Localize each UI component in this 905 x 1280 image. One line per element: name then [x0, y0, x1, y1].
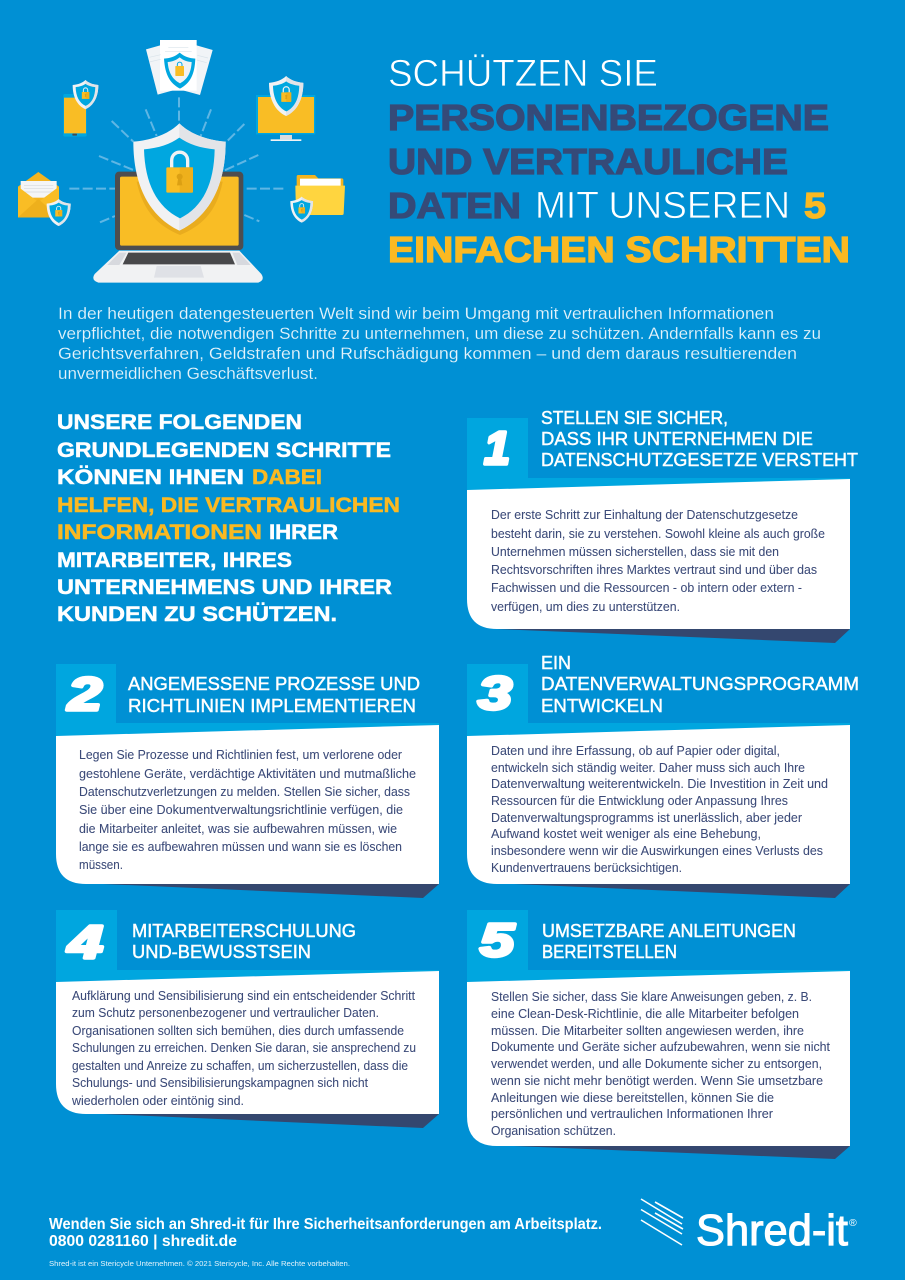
icon: folder with shield	[290, 175, 345, 223]
step 3 body text: Kundenvertrauens berücksichtigen.	[491, 860, 682, 875]
footer contact: Wenden Sie sich an Shred-it für Ihre Sicherheitsanforderungen am Arbeitsplatz.	[49, 1216, 602, 1233]
step 2 number: 2	[67, 668, 103, 720]
lead statement: HELFEN, DIE VERTRAULICHEN	[57, 494, 400, 517]
icon: laptop	[93, 172, 263, 283]
step 1 body text: verfügen, um dies zu unterstützen.	[491, 599, 680, 614]
intro paragraph: Gerichtsverfahren, Geldstrafen und Rufschädigung kommen – und dem daraus resultierenden	[58, 345, 797, 363]
lead statement: UNSERE FOLGENDEN	[57, 411, 302, 434]
lead statement: UNTERNEHMENS UND IHRER	[57, 576, 392, 599]
step 2 body text: gestohlene Geräte, verdächtige Aktivitäten und mutmaßliche	[79, 766, 416, 781]
step 4 body text: Organisationen sollten sich bemühen, dies durch umfassende	[72, 1023, 404, 1038]
step 4 heading	[132, 920, 356, 962]
illustration: laptop protected by shield with connected devices	[18, 40, 345, 283]
step 5 body text: Stellen Sie sicher, dass Sie klare Anweisungen geben, z. B.	[491, 989, 812, 1004]
lead statement: KUNDEN ZU SCHÜTZEN.	[57, 603, 337, 626]
step 2 body text: Sie über eine Dokumentverwaltungsrichtlinie verfügen, die	[79, 802, 403, 817]
step 3 body text: entwickeln sich ständig weiter. Daher muss sich auch Ihre	[491, 760, 805, 775]
step 2 body text: Datenschutzverletzungen zu melden. Stellen Sie sicher, dass	[79, 784, 410, 799]
step 3 body text: Daten und ihre Erfassung, ob auf Papier oder digital,	[491, 743, 780, 758]
step 3 body text: Datenverwaltungsprogramms ist unerlässlich, aber jeder	[491, 810, 803, 825]
step 2 body text	[79, 747, 416, 872]
panel: step 4	[56, 910, 439, 1128]
step 3 heading: DATENVERWALTUNGSPROGRAMM	[541, 673, 859, 694]
step 4 body text	[71, 988, 416, 1108]
panel: step 2	[56, 664, 439, 898]
icon: documents with shield	[146, 40, 213, 95]
step 2 heading	[128, 673, 420, 716]
panel: step 1	[467, 407, 858, 643]
icon: envelope with shield	[18, 172, 71, 226]
step 5 body text: Organisation schützen.	[491, 1123, 616, 1138]
step 2 heading: ANGEMESSENE PROZESSE UND	[128, 673, 420, 694]
intro paragraph: unvermeidlichen Geschäftsverlust.	[58, 365, 318, 383]
title	[388, 53, 850, 270]
lead statement: IHRER	[269, 521, 338, 544]
step 5 heading: UMSETZBARE ANLEITUNGEN	[542, 920, 796, 941]
step 3 body text: Ressourcen für die Entwicklung oder Anpassung Ihres	[491, 793, 788, 808]
logo: Shred-it: ®	[849, 1217, 857, 1229]
step 5 body text: persönlichen und vertraulichen Informationen Ihrer	[491, 1106, 774, 1121]
lead statement: INFORMATIONEN	[57, 521, 262, 544]
panel: step 5	[467, 910, 850, 1159]
step 2 heading: RICHTLINIEN IMPLEMENTIEREN	[128, 695, 416, 716]
icon: desktop monitor with shield	[256, 76, 315, 141]
dashed connector rays	[69, 97, 286, 222]
step 5 body text: eine Clean-Desk-Richtlinie, die alle Mitarbeiter befolgen	[491, 1006, 799, 1021]
lead statement: MITARBEITER, IHRES	[57, 549, 292, 572]
lead statement: KÖNNEN IHNEN	[57, 466, 244, 489]
step 1 number: 1	[484, 422, 510, 474]
step 5 heading	[542, 920, 796, 962]
step 2 body text: die Mitarbeiter anleitet, was sie aufbewahren müssen, wie	[79, 821, 397, 836]
legal note: Shred-it ist ein Stericycle Unternehmen. © 2021 Stericycle, Inc. Alle Rechte vorbehalten.	[49, 1259, 350, 1268]
step 2 body text: Legen Sie Prozesse und Richtlinien fest, um verlorene oder	[79, 747, 403, 762]
lead statement: DABEI	[252, 466, 322, 489]
footer contact: 0800 0281160 | shredit.de	[49, 1233, 237, 1250]
step 3 body text: Datenverwaltung weiterentwickeln. Die Investition in Zeit und	[491, 776, 828, 791]
lead statement: GRUNDLEGENDEN SCHRITTE	[57, 439, 391, 462]
step 2 body text: müssen.	[79, 857, 123, 872]
title: UND VERTRAULICHE	[388, 141, 788, 182]
step 3 body text	[491, 743, 828, 875]
title: MIT UNSEREN	[535, 185, 790, 227]
step 3 body text: Aufwand kostet weit weniger als eine Behebung,	[491, 826, 761, 841]
title: DATEN	[388, 185, 521, 226]
title: 5	[804, 185, 826, 226]
step 3 heading	[541, 652, 859, 716]
step 5 body text	[490, 989, 830, 1138]
footer contact	[49, 1216, 602, 1250]
step 1 body text	[491, 507, 825, 614]
step 5 number: 5	[480, 914, 516, 966]
title: PERSONENBEZOGENE	[388, 97, 829, 138]
icon: main shield with padlock	[133, 123, 226, 235]
step 5 body text: Anleitungen wie diese bereitstellen, können Sie die	[491, 1090, 774, 1105]
intro paragraph	[58, 305, 821, 383]
step 4 body text: wiederholen oder eintönig sind.	[71, 1093, 244, 1108]
step 5 body text: Dokumente und Geräte sicher aufzubewahren, wenn sie nicht	[491, 1039, 830, 1054]
step 4 heading: UND-BEWUSSTSEIN	[132, 941, 311, 962]
step 1 heading	[541, 407, 858, 470]
step 4 body text: Schulungen zu erreichen. Denken Sie daran, sie ansprechend zu	[72, 1040, 416, 1055]
step 1 body text: Unternehmen müssen sicherstellen, dass sie mit den	[491, 544, 779, 559]
step 1 heading: DATENSCHUTZGESETZE VERSTEHT	[541, 449, 858, 470]
step 3 number: 3	[478, 667, 513, 719]
icon: tablet with shield	[63, 80, 98, 137]
lead statement	[57, 411, 400, 626]
step 4 body text: zum Schutz personenbezogener und vertraulicher Daten.	[72, 1005, 379, 1020]
intro paragraph: verpflichtet, die notwendigen Schritte zu unternehmen, um diese zu schützen. Andernfalls kann es zu	[58, 325, 821, 343]
step 1 body text: Fachwissen und die Ressourcen - ob intern oder extern -	[491, 580, 802, 595]
title: EINFACHEN SCHRITTEN	[388, 229, 850, 270]
step 1 body text: besteht darin, sie zu verstehen. Sowohl kleine als auch große	[491, 526, 825, 541]
step 5 body text: wenn sie nicht mehr benötigt werden. Wenn Sie umsetzbare	[490, 1073, 823, 1088]
step 4 heading: MITARBEITERSCHULUNG	[132, 920, 356, 941]
step 2 body text: lange sie es aufbewahren müssen und wann sie es löschen	[79, 839, 402, 854]
step 5 heading: BEREITSTELLEN	[542, 941, 677, 962]
step 4 number: 4	[67, 916, 103, 968]
step 1 body text: Der erste Schritt zur Einhaltung der Datenschutzgesetze	[491, 507, 798, 522]
step 1 heading: DASS IHR UNTERNEHMEN DIE	[541, 428, 813, 449]
title: SCHÜTZEN SIE	[388, 53, 658, 95]
panel: step 3	[467, 652, 859, 898]
step 1 body text: Rechtsvorschriften ihres Marktes vertraut sind und über das	[491, 562, 817, 577]
step 4 body text: Schulungs- und Sensibilisierungskampagnen sich nicht	[72, 1075, 368, 1090]
intro paragraph: In der heutigen datengesteuerten Welt sind wir beim Umgang mit vertraulichen Informationen	[58, 305, 774, 323]
step 5 body text: verwendet werden, und alle Dokumente sicher zu entsorgen,	[491, 1056, 822, 1071]
step 1 heading: STELLEN SIE SICHER,	[541, 407, 728, 428]
step 3 heading: EIN	[541, 652, 571, 673]
logo: Shred-it: Shred-it	[696, 1206, 848, 1255]
step 3 body text: insbesondere wenn wir die Auswirkungen eines Verlusts des	[491, 843, 823, 858]
step 4 body text: gestalten und Anreize zu schaffen, um sicherzustellen, dass die	[72, 1058, 408, 1073]
step 3 heading: ENTWICKELN	[541, 695, 663, 716]
logo: Shred-it	[641, 1199, 857, 1255]
step 5 body text: müssen. Die Mitarbeiter sollten angewiesen werden, ihre	[491, 1023, 804, 1038]
step 4 body text: Aufklärung und Sensibilisierung sind ein entscheidender Schritt	[72, 988, 415, 1003]
